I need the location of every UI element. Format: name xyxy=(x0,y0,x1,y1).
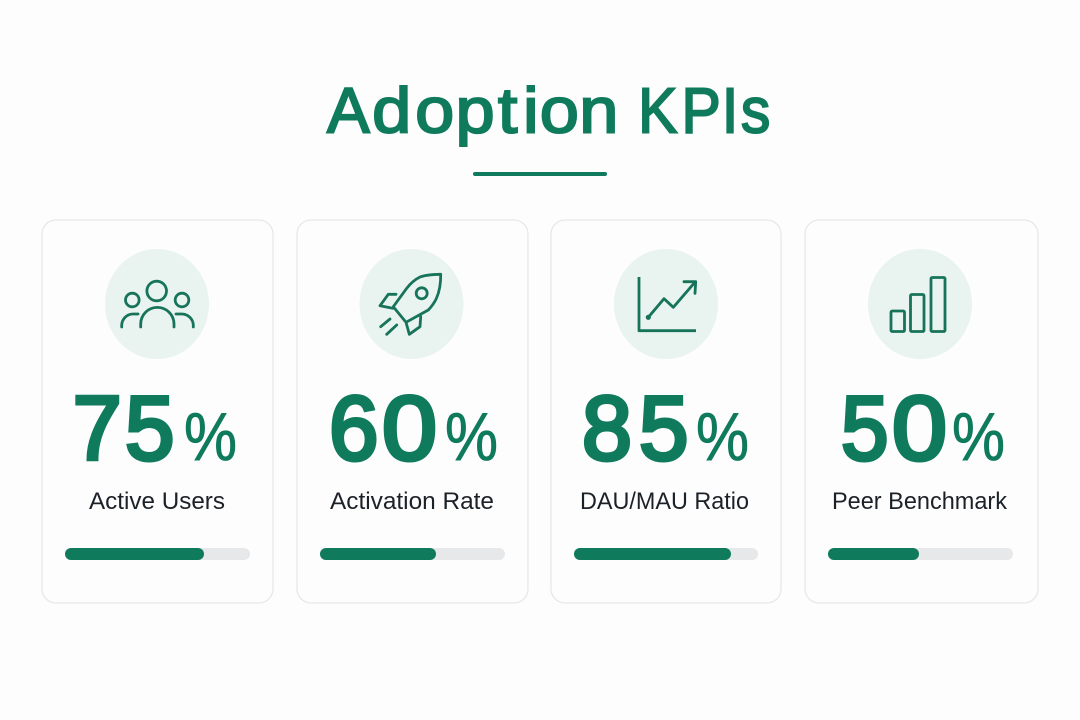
value: 50 percent: 0 xyxy=(892,378,947,480)
label: Active Users: Active Users xyxy=(89,488,225,515)
value: 75 percent: % xyxy=(184,399,237,475)
value: 50 percent: % xyxy=(952,399,1005,475)
value: 75 percent: 7 xyxy=(73,378,122,480)
value: 85 percent xyxy=(582,378,749,480)
progress bar: 50% xyxy=(828,548,1013,560)
label: DAU/MAU Ratio: DAU/MAU Ratio xyxy=(580,488,749,515)
progress bar: 85% xyxy=(574,548,758,560)
icon: trend chart xyxy=(639,277,696,331)
title xyxy=(327,74,770,147)
progress bar: 75% xyxy=(65,548,250,560)
icon: rocket xyxy=(380,274,441,334)
panel: Peer Benchmark xyxy=(805,220,1038,603)
value: 85 percent: 5 xyxy=(639,378,688,480)
icon: users xyxy=(122,281,193,327)
value: 75 percent: 5 xyxy=(125,378,174,480)
title: doption xyxy=(372,75,618,147)
value: 60 percent: % xyxy=(445,399,498,475)
title: KPIs xyxy=(638,75,770,147)
value: 60 percent xyxy=(329,378,498,480)
value: 50 percent xyxy=(841,378,1005,480)
icon: bar chart xyxy=(891,278,945,332)
panel: Active Users xyxy=(42,220,273,603)
value: 85 percent: 8 xyxy=(582,378,632,480)
value: 50 percent: 5 xyxy=(841,378,888,480)
value: 60 percent: 6 xyxy=(329,378,378,480)
value: 60 percent: 0 xyxy=(382,378,437,480)
value: 85 percent: % xyxy=(696,399,749,475)
panel: DAU/MAU Ratio xyxy=(551,220,781,603)
label: Peer Benchmark: Peer Benchmark xyxy=(832,488,1008,515)
title: A xyxy=(327,74,370,146)
progress bar: 60% xyxy=(320,548,505,560)
panel: Activation Rate xyxy=(297,220,528,603)
value: 75 percent xyxy=(73,378,237,480)
title underline xyxy=(473,172,607,176)
label: Activation Rate: Activation Rate xyxy=(330,488,494,515)
